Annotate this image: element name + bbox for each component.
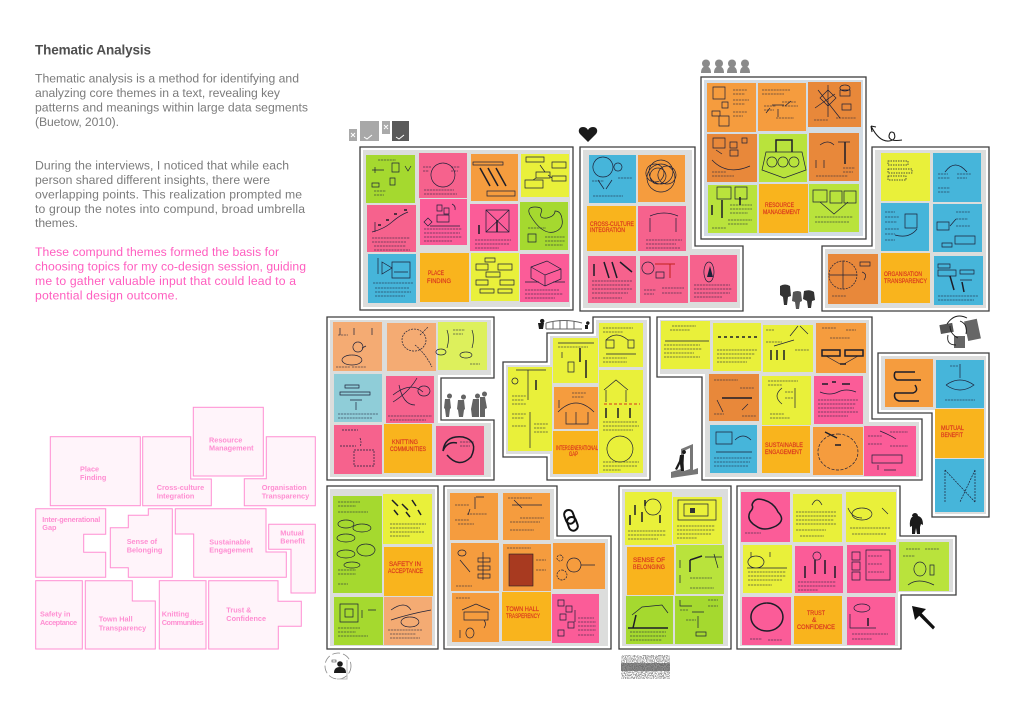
map: Trust & Confidence: Confidence xyxy=(226,614,266,623)
map: Resource Management xyxy=(193,407,263,476)
icon: circular arrows with noise blocks xyxy=(939,316,981,348)
panel: Intergenerational Gap xyxy=(503,317,650,480)
note: yellow cycle xyxy=(762,376,811,425)
note: orange magnifier xyxy=(553,543,605,589)
panel: Resource Management xyxy=(701,77,866,239)
note: orange circles xyxy=(638,155,685,202)
note: yellow tanks xyxy=(809,184,859,232)
map: Mutual Benefit: Benefit xyxy=(280,537,306,546)
note: theme title: ACCEPTANCE xyxy=(388,568,423,575)
note: theme title: MANAGEMENT xyxy=(763,209,800,216)
map: Safety in Acceptance xyxy=(36,581,82,649)
note: theme title xyxy=(759,184,808,233)
note: theme title: & xyxy=(812,617,817,624)
note: yellow doors xyxy=(708,185,757,233)
note: pink block xyxy=(520,254,569,302)
map: Town Hall Transparency: Transparency xyxy=(99,623,147,632)
note: theme title: BENEFIT xyxy=(941,432,963,439)
text block: pink highlight: choosing topics for my co-design session, guiding xyxy=(35,260,306,274)
map: Sustainable Engagement: Sustainable xyxy=(209,537,250,546)
map: Trust & Confidence xyxy=(209,581,301,649)
note: yellow gate xyxy=(759,134,807,182)
map: Safety in Acceptance: Safety in xyxy=(40,610,70,619)
map: Cross-culture Integration: Integration xyxy=(157,491,194,500)
note: theme title: COMMUNITIES xyxy=(390,446,426,453)
panel: Sustainable Engagement xyxy=(657,317,922,480)
text block: interviews: themes. xyxy=(35,216,78,230)
map: Sense of Belonging: Sense of xyxy=(127,537,158,546)
panel: Sense of Belonging xyxy=(619,486,731,649)
map: Sense of Belonging: Belonging xyxy=(127,545,162,554)
map: Knitting Communities xyxy=(159,581,206,649)
map: Safety in Acceptance: Acceptance xyxy=(40,618,77,627)
note: theme title: TRUST xyxy=(807,610,825,617)
note: theme title xyxy=(384,424,432,473)
panel: Trust & Confidence xyxy=(737,486,956,649)
note: theme title: BELONGING xyxy=(633,564,665,571)
note: blue box xyxy=(881,203,929,251)
note: theme title xyxy=(384,547,433,596)
note: orange boxes xyxy=(707,83,756,132)
note: pink figures xyxy=(638,206,686,251)
text block: interviews: person shared different insights, there were xyxy=(35,173,270,187)
icon: noise strip xyxy=(621,655,670,679)
note: blue circles xyxy=(589,155,636,203)
icon: big black arrow xyxy=(912,606,935,630)
text block: definition: patterns and meanings within large data segments xyxy=(35,101,308,115)
title: Thematic Analysis xyxy=(35,43,151,58)
panel: Cross-culture Integration xyxy=(580,147,743,311)
note: blue cycle xyxy=(936,360,984,408)
note: pink atoms xyxy=(386,376,434,423)
map: Sustainable Engagement xyxy=(175,509,286,577)
icon: person with speech in dashed circle xyxy=(325,653,351,679)
panel: Organisation Transparency xyxy=(822,147,989,311)
note: theme title: SAFETY IN xyxy=(389,561,421,568)
note: theme title: INTEGRATION xyxy=(590,227,625,234)
map: Sense of Belonging xyxy=(110,509,172,577)
map: Organisation Transparency: Organisation xyxy=(262,483,307,492)
note: theme title xyxy=(935,409,984,458)
note: pink blob xyxy=(741,492,790,542)
map: Resource Management: Management xyxy=(209,444,254,453)
note: green path xyxy=(626,596,673,644)
map: Knitting Communities: Communities xyxy=(162,618,204,627)
text block: definition xyxy=(35,72,308,129)
note: pink flow xyxy=(864,426,916,476)
note: pink spiral xyxy=(436,426,484,475)
note: yellow funnel xyxy=(763,325,813,372)
note: orange balance xyxy=(809,133,859,181)
map: Inter-generational Gap: Gap xyxy=(42,523,57,532)
note: theme title xyxy=(794,596,842,644)
note: orange scales xyxy=(816,323,866,373)
note: orange arrows xyxy=(885,359,933,407)
map: Town Hall Transparency: Town Hall xyxy=(99,615,133,624)
note: theme title: CONFIDENCE xyxy=(797,624,836,631)
text block: pink highlight xyxy=(35,245,306,303)
note: orange cluster xyxy=(333,322,382,371)
icon: noise squares with marks xyxy=(349,121,409,141)
note: blue xyxy=(368,254,416,303)
text block: definition: (Buetow, 2010). xyxy=(35,115,119,129)
map: Organisation Transparency: Transparency xyxy=(262,491,310,500)
note: yellow row of figures xyxy=(713,323,761,371)
note: pale yellow people xyxy=(436,322,487,370)
note: theme title xyxy=(502,592,551,641)
icon: bridge with people xyxy=(538,319,590,329)
note: theme title xyxy=(587,206,636,251)
icon: chain links xyxy=(563,509,579,532)
text block: interviews: During the interviews, I noticed that while each xyxy=(35,158,289,172)
note: orange xyxy=(450,493,498,540)
note: blue tree xyxy=(933,204,982,252)
icon: person at door xyxy=(671,444,698,478)
note: theme title: KNITTING xyxy=(392,439,418,446)
icon: curly arrow xyxy=(871,126,902,141)
note: orange path xyxy=(709,374,759,421)
note: pink figure xyxy=(690,255,737,302)
map: Place Finding: Place xyxy=(80,465,99,474)
note: green tree xyxy=(675,596,723,644)
panel: Safety in Acceptance xyxy=(327,486,438,649)
note: orange web xyxy=(808,82,861,127)
map: Place Finding: Finding xyxy=(80,473,106,482)
map: Sustainable Engagement: Engagement xyxy=(209,546,254,555)
text block: pink highlight: These compund themes formed the basis for xyxy=(35,245,279,259)
note: pink frame xyxy=(470,204,518,251)
map: Place Finding xyxy=(50,437,140,506)
note: theme title: MUTUAL xyxy=(941,425,964,432)
note: theme title xyxy=(762,426,810,473)
text block: pink highlight: me to gather valuable input that could lead to a xyxy=(35,274,296,288)
note: theme title: ENGAGEMENT xyxy=(765,449,802,456)
map: Trust & Confidence: Trust & xyxy=(226,606,252,615)
note: yellow circle xyxy=(625,492,672,545)
note: theme title: CROSS-CULTURE xyxy=(590,221,634,228)
map: Organisation Transparency xyxy=(244,437,315,506)
map: Mutual Benefit: Mutual xyxy=(280,528,304,537)
note: theme title xyxy=(881,253,930,303)
map: Mutual Benefit xyxy=(269,524,315,593)
icon: three walking figures xyxy=(780,284,815,309)
icon: walking figure xyxy=(910,513,923,534)
note: pink squares xyxy=(552,594,599,643)
note: pink diagonals xyxy=(588,256,636,303)
note: yellow plan xyxy=(673,497,722,544)
map: Cross-culture Integration xyxy=(143,437,211,506)
icon: heart xyxy=(579,127,597,142)
note: green xyxy=(366,155,415,203)
note: yellow figures xyxy=(383,494,432,544)
map: Knitting Communities: Knitting xyxy=(162,610,189,619)
note: yellow stack xyxy=(881,153,930,201)
note: orange circle xyxy=(828,254,878,304)
note: yellow text xyxy=(661,321,710,369)
note: green telescope xyxy=(676,545,724,594)
note: pink network xyxy=(420,199,467,245)
note: theme title: GAP xyxy=(569,451,578,458)
panel: Knitting Communities xyxy=(327,317,494,480)
note: theme title: TRANSPARENCY xyxy=(884,278,927,285)
note: blue chart xyxy=(934,256,983,305)
note: pale blue tree xyxy=(334,374,382,422)
note: theme title xyxy=(420,253,469,302)
note: pink wheelchair xyxy=(847,597,895,645)
text block: definition: Thematic analysis is a method for identifying and xyxy=(35,72,299,86)
note: theme title: PLACE xyxy=(428,270,444,277)
note: pink hill xyxy=(367,205,416,252)
text block: interviews xyxy=(35,158,305,230)
note: orange hall xyxy=(452,593,499,642)
note: theme title: TOWN HALL xyxy=(506,606,539,613)
note: theme title: RESOURCE xyxy=(765,202,794,209)
note: yellow trust xyxy=(743,545,792,593)
map: Cross-culture Integration: Cross-culture xyxy=(157,483,204,492)
note: theme title: SENSE OF xyxy=(633,557,665,564)
note: yellow bubbles xyxy=(471,253,519,301)
note: orange house xyxy=(554,387,598,429)
note: pink diagram xyxy=(640,256,688,303)
note: orange steps xyxy=(451,543,499,591)
icon: four people xyxy=(701,60,750,73)
note: pink figures xyxy=(795,546,843,593)
note: theme title xyxy=(553,431,598,474)
note: orange line xyxy=(503,493,550,540)
map: Resource Management: Resource xyxy=(209,435,242,444)
note: tall yellow people xyxy=(599,370,643,473)
map: Town Hall Transparency xyxy=(85,581,155,649)
note: theme title: SUSTAINABLE xyxy=(765,442,804,449)
note: orange curtain xyxy=(503,544,551,591)
note: peach blob xyxy=(387,323,436,371)
note: yellow xyxy=(553,338,598,383)
text block: definition: analyzing core themes in a text, revealing key xyxy=(35,86,281,100)
icon: grey silhouettes xyxy=(444,392,487,417)
note: theme title: ORGANISATION xyxy=(884,271,922,278)
note: blue arc xyxy=(933,153,981,202)
note: pink flow xyxy=(334,425,382,474)
note: theme title xyxy=(627,547,674,595)
note: orange slope xyxy=(384,597,432,645)
note: green blob xyxy=(520,202,568,250)
note: orange loop xyxy=(813,427,863,475)
note: yellow flow xyxy=(521,154,569,197)
note: yellow cycle xyxy=(599,323,643,367)
note: theme title: INTERGENERATIONAL xyxy=(556,445,598,452)
note: orange spider xyxy=(758,83,806,131)
note: orange xyxy=(471,154,518,201)
note: yellow text xyxy=(793,494,842,542)
note: theme title: FINDING xyxy=(427,278,451,285)
text block: interviews: overlapping points. This realization prompted me xyxy=(35,187,302,201)
theme map xyxy=(36,407,315,649)
note: tall green xyxy=(333,496,382,593)
note: green frame xyxy=(334,597,383,645)
note: blue lines xyxy=(935,459,984,512)
text block: pink highlight: potential design outcome. xyxy=(35,289,178,303)
panel: Town Hall Transparency xyxy=(444,486,611,649)
note: orange map xyxy=(707,134,757,182)
note: pink circle xyxy=(419,153,467,198)
note: blue city xyxy=(710,425,757,473)
note: green face xyxy=(899,542,949,591)
note: theme title: TRASPERENCY xyxy=(506,613,540,620)
map: Inter-generational Gap: Inter-generational xyxy=(42,515,100,524)
text block: interviews: to group the notes into compund, broad umbrella xyxy=(35,202,305,216)
panel: Place Finding xyxy=(360,147,573,310)
note: yellow oval xyxy=(846,492,896,542)
panel: Mutual Benefit xyxy=(878,353,989,517)
note: pink ring xyxy=(742,597,791,645)
note: pink landscape xyxy=(814,376,863,424)
map: Inter-generational Gap xyxy=(36,509,106,577)
note: pink chart xyxy=(847,545,896,593)
note: tall yellow xyxy=(508,367,552,451)
